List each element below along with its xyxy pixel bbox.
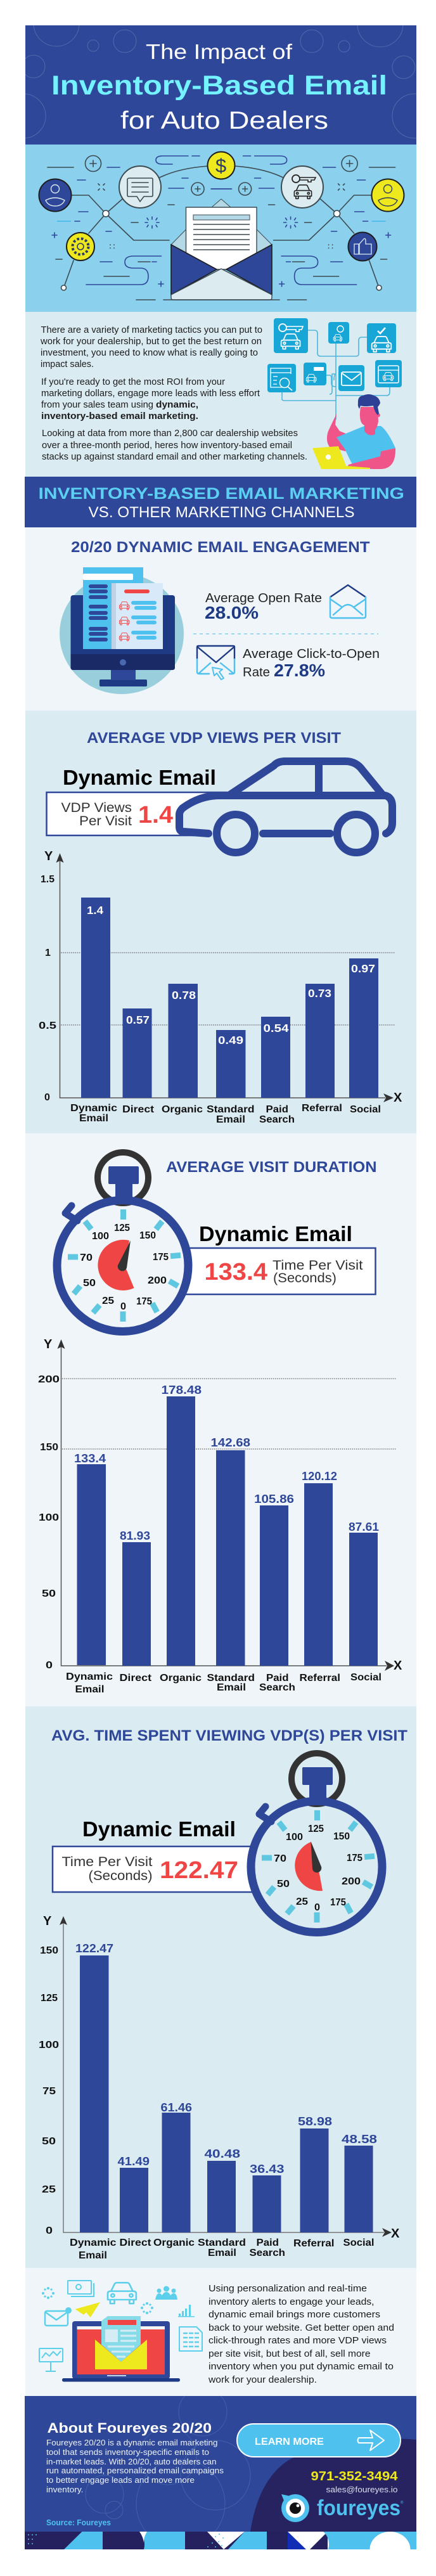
text block: about copy: Foureyes 20/20 is a dynamic email marketing bbox=[46, 2438, 218, 2447]
banner: section title: INVENTORY-BASED EMAIL MARKETING bbox=[38, 485, 404, 503]
text block: intro paragraph 2: inventory-based email marketing. bbox=[41, 411, 198, 422]
divider bbox=[193, 633, 378, 634]
bar chart: visit duration: 105.86 bbox=[254, 1493, 294, 1505]
bar chart: VDP views per visit: Organic bbox=[162, 1104, 203, 1115]
bar chart: visit duration: Organic bbox=[160, 1673, 202, 1684]
bar chart: VDP views per visit: 0 bbox=[44, 1092, 50, 1103]
email: sales@foureyes.io bbox=[326, 2485, 398, 2494]
bar chart: time viewing VDPs: Referral bbox=[293, 2238, 335, 2249]
bar chart: VDP views per visit: Paid bbox=[266, 1104, 288, 1115]
text block: closing copy: inventory alerts to engage your leads, bbox=[208, 2297, 374, 2307]
bar chart: VDP views per visit: Search bbox=[259, 1114, 295, 1125]
bar chart: visit duration: 142.68 bbox=[210, 1436, 250, 1449]
illustration: laptop with email and marketing icons bbox=[39, 2281, 202, 2382]
text block: closing copy: back to your website. Get better open and bbox=[208, 2323, 394, 2333]
source: Source: Foureyes bbox=[46, 2518, 111, 2527]
title: for Auto Dealers bbox=[120, 107, 328, 134]
bar chart: visit duration: 133.4 bbox=[74, 1452, 106, 1465]
bar chart: visit duration: Direct bbox=[119, 1673, 151, 1684]
bar chart: VDP views per visit: 0.73 bbox=[308, 987, 331, 1000]
icon: stopwatch: 25 bbox=[296, 1897, 308, 1907]
text block: closing copy: work for your dealership. bbox=[208, 2375, 317, 2385]
icon: chat bubble bbox=[119, 166, 161, 208]
text block: intro paragraph 1: work for your dealership, but to get the best return on bbox=[40, 337, 262, 347]
icon: stopwatch: 150 bbox=[139, 1230, 156, 1241]
panel: closing message bbox=[25, 2268, 416, 2396]
bar chart: VDP views per visit: Direct bbox=[122, 1104, 154, 1115]
icon: user right bbox=[371, 179, 404, 212]
panel: introduction bbox=[25, 312, 416, 477]
bar chart: time viewing VDPs bbox=[39, 1914, 400, 2261]
icon: dollar bbox=[208, 152, 234, 179]
bar chart: visit duration: 81.93 bbox=[120, 1530, 150, 1542]
bar chart: visit duration: Referral bbox=[299, 1673, 340, 1684]
icon: stopwatch: 200 bbox=[148, 1275, 167, 1286]
bar chart: VDP views per visit: Dynamic bbox=[70, 1103, 117, 1114]
bar chart: time viewing VDPs: Email bbox=[208, 2248, 236, 2258]
icon: stopwatch: 175 bbox=[153, 1252, 169, 1263]
bar chart: visit duration: X bbox=[394, 1659, 402, 1673]
bar chart: visit duration: 0 bbox=[46, 1660, 53, 1671]
title: Inventory-Based Email bbox=[51, 70, 387, 101]
bar chart: time viewing VDPs: Search bbox=[250, 2248, 285, 2258]
bar chart: VDP views per visit bbox=[39, 849, 402, 1125]
heading: AVERAGE VDP VIEWS PER VISIT bbox=[87, 730, 341, 747]
icon: stopwatch: 70 bbox=[274, 1853, 286, 1864]
icon: mail tile bbox=[338, 365, 364, 391]
callout: VDP views per visit: Per Visit bbox=[79, 814, 132, 828]
icon: envelope with cursor bbox=[197, 646, 234, 679]
stat: average click-to-open rate: 27.8% bbox=[274, 660, 325, 680]
text block: about copy: in-market leads. With 20/20, auto dealers can bbox=[46, 2457, 217, 2466]
icon: key and car tile bbox=[274, 318, 308, 353]
text block: closing copy: per site visit, but best of all, sell more bbox=[208, 2349, 370, 2359]
bar chart: VDP views per visit: 0.54 bbox=[264, 1022, 289, 1034]
bar chart: time viewing VDPs: 75 bbox=[42, 2086, 56, 2097]
icon: stopwatch: 25 bbox=[102, 1296, 114, 1306]
bar chart: VDP views per visit: 0.49 bbox=[218, 1034, 243, 1046]
text block: intro paragraph 1: investment, you need to know what is really going to bbox=[41, 348, 258, 358]
bar chart: time viewing VDPs: 100 bbox=[39, 2040, 59, 2051]
bar chart: time viewing VDPs: 61.46 bbox=[161, 2101, 192, 2114]
bar chart: time viewing VDPs: Standard bbox=[198, 2238, 246, 2248]
bar chart: visit duration: 200 bbox=[38, 1374, 60, 1385]
text block: about copy bbox=[46, 2438, 224, 2494]
decorative bubbles bbox=[85, 2396, 251, 2532]
banner: section title bbox=[25, 477, 416, 527]
bar chart: time viewing VDPs: 40.48 bbox=[204, 2148, 240, 2160]
callout: time per visit bbox=[171, 1248, 375, 1294]
panel: title header bbox=[25, 25, 416, 145]
stat: average open rate: Average Open Rate bbox=[205, 591, 322, 605]
text block: intro paragraph 2: If you're ready to get the most ROI from your bbox=[41, 377, 225, 387]
heading: AVG. TIME SPENT VIEWING VDP(S) PER VISIT bbox=[51, 1727, 407, 1744]
text block: intro paragraph 3: Looking at data from more than 2,800 car dealership websites bbox=[42, 428, 298, 439]
callout: VDP views per visit: 1.4 bbox=[138, 802, 173, 828]
footer geometric pattern bbox=[25, 2532, 416, 2549]
bar chart: time viewing VDPs: X bbox=[391, 2227, 400, 2241]
icon: stopwatch: 70 bbox=[80, 1253, 93, 1263]
bar chart: visit duration: Y bbox=[44, 1337, 53, 1351]
bar chart: time viewing VDPs: 36.43 bbox=[250, 2163, 284, 2175]
bar chart: visit duration: Standard bbox=[207, 1673, 255, 1684]
label: dynamic email: Dynamic Email bbox=[82, 1817, 236, 1841]
bar chart: visit duration: 120.12 bbox=[302, 1470, 337, 1483]
icon: stopwatch: 150 bbox=[333, 1831, 350, 1842]
logo: foureyes: ® bbox=[401, 2501, 404, 2505]
bar chart: time viewing VDPs: Organic bbox=[153, 2238, 195, 2248]
bar chart: VDP views per visit: Social bbox=[350, 1104, 381, 1115]
network lines and dashes bbox=[48, 156, 231, 300]
text block: about copy: tool that sends inventory-specific emails to bbox=[46, 2447, 209, 2457]
icon: open envelope bbox=[164, 199, 279, 300]
logo: foureyes: foureyes bbox=[317, 2496, 401, 2520]
panel: avg time spent viewing VDPs per visit bbox=[25, 1706, 416, 2268]
stat: average open rate bbox=[205, 591, 322, 622]
text block: intro paragraph 2 bbox=[41, 377, 260, 422]
panel: hero illustration bbox=[25, 145, 416, 312]
bar chart: visit duration: 100 bbox=[39, 1512, 59, 1523]
text block: intro paragraph 2: dynamic, bbox=[156, 400, 198, 410]
title bbox=[51, 40, 387, 134]
title: The Impact of bbox=[146, 40, 293, 63]
icon: car sale tile bbox=[304, 363, 326, 385]
decorative navy corner bbox=[250, 2439, 416, 2532]
bar chart: time viewing VDPs: 25 bbox=[42, 2184, 56, 2195]
panel: about Foureyes bbox=[25, 2396, 416, 2532]
callout: time per visit: 133.4 bbox=[204, 1259, 267, 1285]
bar chart: visit duration: Social bbox=[350, 1672, 382, 1683]
stat: average click-to-open rate bbox=[243, 647, 380, 680]
icon: stopwatch: 125 bbox=[308, 1824, 324, 1834]
icon: approved car tile bbox=[367, 323, 396, 353]
callout: VDP views per visit: VDP Views bbox=[61, 801, 132, 815]
label: dynamic email: Dynamic Email bbox=[199, 1222, 352, 1246]
bar chart: time viewing VDPs: 122.47 bbox=[75, 1942, 113, 1955]
icon: stopwatch: 175 bbox=[330, 1897, 346, 1908]
text block: intro paragraph 2: marketing dollars, engage more leads with less effort bbox=[41, 389, 260, 399]
bar chart: VDP views per visit: Standard bbox=[207, 1104, 255, 1115]
callout: time per visit: (Seconds) bbox=[89, 1869, 152, 1883]
text block: closing copy: dynamic email brings more customers bbox=[208, 2310, 380, 2320]
text block: intro paragraph 3: over a three-month period, heres how inventory-based email bbox=[42, 441, 292, 451]
icon: search tile bbox=[267, 364, 296, 392]
panel: average visit duration bbox=[25, 1133, 416, 1706]
callout: time per visit bbox=[53, 1846, 268, 1892]
callout: time per visit: 122.47 bbox=[160, 1857, 238, 1884]
icon: open envelope bbox=[330, 585, 366, 618]
bar chart: time viewing VDPs: 150 bbox=[40, 1945, 58, 1956]
text block: intro paragraph 1: There are a variety of marketing tactics you can put to bbox=[41, 325, 262, 335]
bar chart: time viewing VDPs: Email bbox=[79, 2250, 107, 2261]
bar chart: VDP views per visit: Email bbox=[79, 1113, 108, 1124]
icon: stopwatch: 100 bbox=[92, 1231, 109, 1242]
bar chart: time viewing VDPs: 41.49 bbox=[118, 2155, 150, 2168]
icon: user left bbox=[39, 179, 71, 212]
icon: gear bbox=[67, 233, 94, 261]
icon: exchange tile bbox=[328, 322, 349, 344]
icon: car outline bbox=[179, 761, 392, 853]
text block: intro paragraph 3 bbox=[42, 428, 307, 462]
text block: intro paragraph 1 bbox=[40, 325, 262, 370]
bar chart: visit duration: 178.48 bbox=[161, 1384, 202, 1396]
text block: about copy: run automated, personalized email campaigns bbox=[46, 2466, 224, 2475]
icon: browser tile bbox=[375, 360, 402, 387]
logo: foureyes bbox=[281, 2494, 404, 2522]
icon: stopwatch: 175 bbox=[136, 1296, 152, 1307]
bar chart: VDP views per visit: 1 bbox=[45, 948, 51, 958]
icon: stopwatch: 0 bbox=[314, 1902, 320, 1913]
text block: closing copy: inventory when you put dynamic email to bbox=[208, 2362, 394, 2372]
icon: thumbs up bbox=[349, 232, 376, 261]
icon: stopwatch bbox=[251, 1753, 382, 1932]
bar chart: visit duration: Email bbox=[75, 1684, 104, 1695]
illustration: person with laptop bbox=[312, 394, 395, 469]
icon: stopwatch: 175 bbox=[347, 1853, 362, 1864]
connector lines bbox=[282, 330, 390, 420]
stat: average click-to-open rate: Average Click-to-Open bbox=[243, 647, 380, 661]
heading: AVERAGE VISIT DURATION bbox=[166, 1159, 376, 1176]
bar chart: time viewing VDPs: Social bbox=[343, 2238, 374, 2248]
bar chart: VDP views per visit: 0.57 bbox=[126, 1014, 150, 1026]
stat: average click-to-open rate: Rate bbox=[243, 666, 270, 679]
bar chart: time viewing VDPs: 48.58 bbox=[342, 2133, 377, 2146]
bar chart: time viewing VDPs: Paid bbox=[256, 2238, 279, 2248]
bar chart: time viewing VDPs: Dynamic bbox=[70, 2238, 117, 2248]
callout: time per visit: Time Per Visit bbox=[272, 1258, 363, 1273]
text block: intro paragraph 1: impact sales. bbox=[41, 359, 94, 370]
banner: section title: VS. OTHER MARKETING CHANNELS bbox=[89, 504, 355, 521]
stat: average open rate: 28.0% bbox=[205, 603, 259, 622]
bar chart: time viewing VDPs: Y bbox=[43, 1914, 52, 1928]
bar chart: VDP views per visit: X bbox=[394, 1091, 402, 1105]
panel: average VDP views per visit bbox=[25, 711, 416, 1133]
panel: 20/20 dynamic email engagement bbox=[25, 527, 416, 711]
callout: VDP views per visit bbox=[47, 792, 231, 835]
heading: About Foureyes 20/20 bbox=[47, 2420, 212, 2436]
icon: stopwatch: 100 bbox=[286, 1832, 303, 1843]
bar chart: visit duration: 150 bbox=[40, 1442, 58, 1453]
icon: stopwatch: 50 bbox=[277, 1879, 290, 1890]
bar chart: visit duration: Paid bbox=[266, 1673, 289, 1684]
callout: time per visit: Time Per Visit bbox=[62, 1855, 153, 1869]
bar chart: VDP views per visit: Referral bbox=[302, 1103, 342, 1114]
bar chart: VDP views per visit: Y bbox=[44, 849, 53, 863]
icon: stopwatch: 50 bbox=[83, 1278, 96, 1289]
bar chart: visit duration bbox=[38, 1337, 402, 1695]
text block: closing copy: Using personalization and real-time bbox=[208, 2284, 367, 2294]
bar chart: VDP views per visit: 0.97 bbox=[351, 962, 375, 975]
icon: stopwatch: 200 bbox=[342, 1876, 361, 1887]
bar chart: visit duration: 50 bbox=[42, 1588, 56, 1599]
bar chart: visit duration: Email bbox=[217, 1682, 246, 1693]
button: learn more: LEARN MORE bbox=[255, 2437, 324, 2447]
label: dynamic email: Dynamic Email bbox=[63, 766, 216, 789]
text block: about copy: to better engage leads and move more bbox=[46, 2475, 195, 2485]
bar chart: time viewing VDPs: Direct bbox=[119, 2238, 151, 2248]
bar chart: time viewing VDPs: 50 bbox=[42, 2136, 56, 2147]
callout: time per visit: (Seconds) bbox=[273, 1271, 337, 1285]
text block: closing copy: click-through rates and more VDP views bbox=[208, 2336, 387, 2346]
bar chart: VDP views per visit: 0.5 bbox=[39, 1021, 56, 1031]
text block: closing copy bbox=[208, 2284, 394, 2385]
decorative speech bubbles bbox=[25, 25, 416, 138]
bar chart: time viewing VDPs: 0 bbox=[46, 2225, 53, 2236]
bar chart: visit duration: 87.61 bbox=[349, 1521, 379, 1533]
icon: stopwatch: 125 bbox=[114, 1223, 130, 1233]
icon: stopwatch: 0 bbox=[120, 1301, 126, 1312]
icon: monitor with inventory email bbox=[60, 567, 184, 694]
icon: dollar: $ bbox=[215, 155, 226, 177]
icon: stopwatch bbox=[57, 1152, 188, 1331]
text block: intro paragraph 3: stacks up against standard email and other marketing channels. bbox=[42, 452, 307, 462]
phone: 971-352-3494 bbox=[311, 2470, 398, 2483]
bar chart: VDP views per visit: 0.78 bbox=[172, 989, 196, 1001]
bar chart: VDP views per visit: 1.4 bbox=[87, 904, 103, 917]
bar chart: time viewing VDPs: 58.98 bbox=[298, 2115, 332, 2128]
text block: intro paragraph 2: from your sales team using bbox=[41, 400, 153, 410]
bar chart: time viewing VDPs: 125 bbox=[41, 1993, 58, 2004]
bar chart: VDP views per visit: Email bbox=[216, 1114, 245, 1125]
bar chart: visit duration: Dynamic bbox=[66, 1671, 113, 1682]
bar chart: visit duration: Search bbox=[259, 1682, 295, 1693]
button: learn more bbox=[237, 2424, 401, 2457]
text block: about copy: inventory. bbox=[46, 2485, 84, 2494]
bar chart: VDP views per visit: 1.5 bbox=[41, 874, 54, 885]
icon: key and car bbox=[281, 166, 323, 208]
heading: 20/20 DYNAMIC EMAIL ENGAGEMENT bbox=[71, 539, 370, 556]
